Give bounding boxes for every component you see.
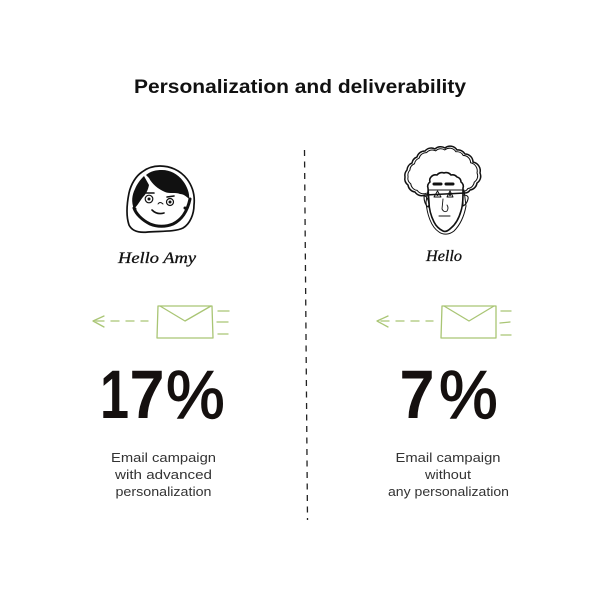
- panel: with personalization: [93, 166, 229, 499]
- greeting: Hello Amy: Hello Amy: [117, 250, 197, 267]
- center dashed divider: [304, 150, 308, 520]
- greeting: Hello: Hello: [425, 248, 462, 265]
- caption: without: [424, 467, 471, 482]
- caption: personalization: [116, 484, 212, 499]
- caption: any personalization: [388, 484, 509, 499]
- stat: 17%: 1: [100, 356, 129, 433]
- stat: 7%: %: [439, 357, 498, 433]
- icon: envelope with arrow: [93, 306, 229, 338]
- stat: 17%: 7: [130, 356, 164, 433]
- caption: [388, 450, 509, 499]
- caption: Email campaign: [111, 450, 216, 465]
- stat: 17%: %: [166, 357, 225, 433]
- caption: [111, 450, 216, 499]
- icon: envelope with arrow: [377, 306, 511, 338]
- caption: with advanced: [114, 467, 212, 482]
- stat: 17%: [100, 356, 225, 433]
- stat: 7%: 7: [400, 356, 434, 433]
- stat: 7%: [400, 356, 498, 433]
- panel: without personalization: [377, 146, 511, 499]
- icon: man face with afro: [405, 146, 481, 234]
- caption: Email campaign: [396, 450, 500, 465]
- icon: woman face: [127, 166, 194, 232]
- title: Personalization and deliverability: [134, 77, 466, 98]
